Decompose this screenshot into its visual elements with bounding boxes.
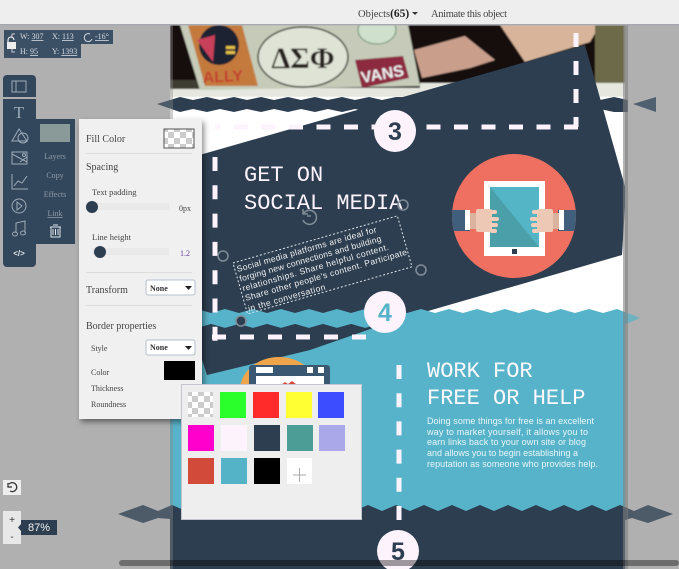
object properties bar: -16° — [95, 32, 109, 41]
body text: work for free: earn links back to your own site or blog — [427, 437, 586, 447]
scrollbar — [119, 560, 679, 566]
zoom controls: - — [10, 532, 14, 543]
number badge 3: 3 — [388, 118, 402, 146]
transform row: None — [150, 284, 168, 293]
body text: work for free: way to market yourself, it allows you to — [426, 427, 588, 437]
zoom controls — [3, 511, 21, 544]
fill color row: Fill Color — [86, 134, 126, 145]
dashed line in section 5 — [396, 365, 402, 520]
toolbar: secondary panel: Link — [47, 209, 63, 218]
colour palette popup — [182, 384, 362, 520]
canvas page — [170, 25, 625, 569]
rotated text block with selection frame: in the conversation — [247, 282, 327, 313]
hero photo: laptop with stickers — [170, 26, 625, 97]
hero photo: laptop with stickers: ALLY — [202, 68, 244, 87]
zoom controls: + — [9, 515, 15, 526]
zoom level label — [18, 520, 57, 535]
spacing section: Text padding — [92, 187, 137, 197]
top bar — [0, 0, 679, 26]
toolbar: tools — [3, 99, 36, 267]
rotated text block with selection frame: forging new connections and building — [238, 233, 383, 284]
top ribbon — [157, 97, 628, 112]
icon: browser window behind palette — [240, 357, 330, 395]
toolbar: tools: </> — [13, 249, 25, 258]
heading: get on social media: SOCIAL MEDIA — [244, 191, 403, 216]
transform row: Transform — [86, 285, 128, 296]
properties panel — [79, 119, 202, 419]
body text: work for free: Doing some things for free is an excellent — [427, 416, 594, 426]
page edge shadows — [170, 25, 628, 569]
object properties bar: H: 95 — [20, 47, 38, 56]
object properties bar: X: 113 — [52, 32, 74, 41]
undo button — [3, 480, 21, 495]
zoom level label: 87% — [28, 522, 50, 534]
body text: work for free: reputation as someone who provides help. — [427, 459, 598, 469]
spacing section: 1.2 — [180, 249, 190, 258]
body text: work for free — [426, 416, 598, 469]
spacing section: 0px — [179, 204, 191, 213]
border properties: Style — [91, 344, 108, 353]
toolbar: secondary panel: Layers — [44, 152, 66, 161]
toolbar: secondary panel: Copy — [46, 171, 64, 180]
hero photo: laptop with stickers: VANS — [360, 63, 406, 87]
heading: get on social media: GET ON — [244, 163, 323, 188]
body text: work for free: and allows you to begin establishing a — [427, 448, 578, 458]
toolbar: secondary panel: Effects — [44, 190, 66, 199]
dashed frame around section 3 — [215, 33, 578, 127]
right ribbon arrow — [633, 97, 656, 112]
number badge 5 — [377, 530, 419, 569]
heading: work for free or help: FREE OR HELP — [427, 386, 585, 411]
spacing section: Line height — [92, 232, 132, 242]
rotated text block with selection frame: Share other people's content. Participate — [244, 247, 408, 303]
toolbar: tools: T — [14, 103, 25, 122]
teal ribbon — [170, 309, 640, 328]
top bar: Animate this object — [431, 9, 507, 20]
rotated text block with selection frame — [233, 216, 412, 314]
rotated text block with selection frame: Social media platforms are ideal for — [235, 224, 378, 274]
number badge 4: 4 — [378, 299, 392, 327]
toolbar: secondary panel — [36, 119, 75, 244]
object properties bar: W: 307 — [20, 32, 43, 41]
rotated text block with selection frame: relationships. Share helpful content. — [241, 242, 390, 293]
hero photo: laptop with stickers: ΔΣΦ — [271, 42, 335, 75]
teal section background — [170, 322, 625, 512]
icon: hands holding tablet — [452, 154, 576, 278]
selection handles — [218, 200, 426, 326]
top bar: Objects(65) — [358, 8, 409, 20]
border properties — [86, 321, 195, 409]
number badge 3 — [374, 110, 416, 152]
toolbar: layout button — [3, 75, 36, 97]
object properties bar: Y: 1393 — [52, 47, 77, 56]
number badge 4 — [364, 291, 406, 333]
border properties: Roundness — [91, 400, 126, 409]
border properties: None — [150, 343, 168, 352]
border properties: Thickness — [91, 384, 123, 393]
border properties: Border properties — [86, 321, 156, 332]
border properties: Color — [91, 368, 110, 377]
transform row — [86, 280, 195, 296]
dashed frame around section 4 — [212, 157, 366, 341]
heading: work for free or help: WORK FOR — [427, 359, 533, 384]
dark footer section — [118, 505, 673, 569]
spacing section: Spacing — [86, 162, 118, 173]
fill color row — [86, 129, 194, 148]
dark wedge below the teal ribbon — [203, 324, 379, 375]
tilted dark panel — [202, 45, 625, 375]
spacing section — [86, 162, 191, 258]
number badge 5: 5 — [391, 538, 405, 566]
object properties bar — [4, 30, 113, 58]
